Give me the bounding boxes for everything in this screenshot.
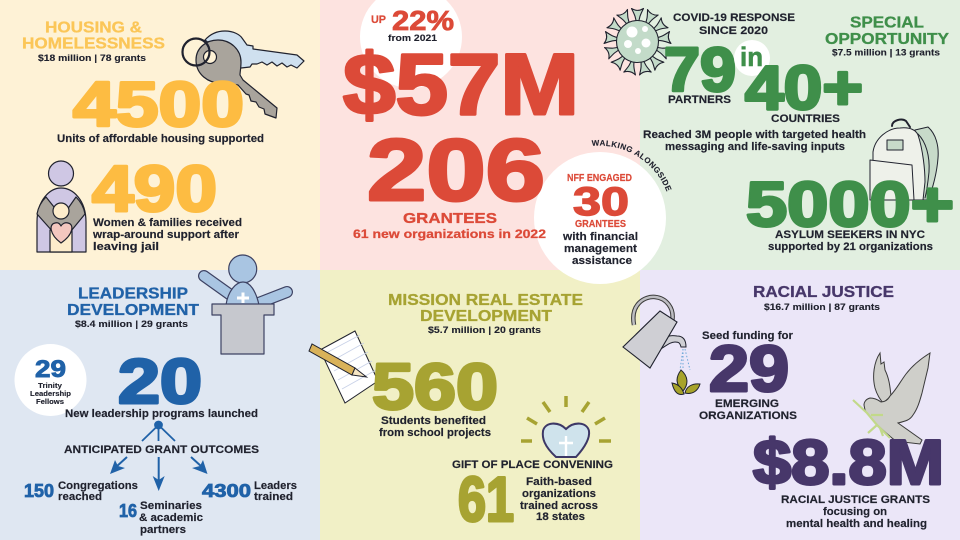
- stat: 40+ countries: COUNTRIES: [771, 113, 840, 125]
- callout: walking alongside circle: 30: [573, 180, 629, 224]
- panel: leadership development: [14, 255, 297, 536]
- heading: mission real estate: [388, 292, 583, 336]
- stat: 490 women and families: leaving jail: [93, 241, 159, 253]
- stat: 20 new programs: 20: [118, 347, 202, 417]
- stat: 4300 leaders: Leaders: [254, 480, 297, 492]
- stat: 5000+ asylum seekers: 5000+: [746, 170, 954, 240]
- stat: up 22 percent: from 2021: [388, 33, 438, 44]
- callout: walking alongside circle: assistance: [572, 255, 632, 267]
- stat: 560 students: 560: [372, 350, 498, 423]
- callout: walking alongside circle: GRANTEES: [575, 219, 626, 230]
- stat: 4300 leaders: trained: [254, 491, 293, 503]
- heading: covid-19 response: [673, 12, 795, 37]
- callout: 29 trinity leadership fellows: 29: [35, 356, 66, 383]
- heading: racial justice: [753, 284, 894, 313]
- stat: 5000+ asylum seekers: ASYLUM SEEKERS IN NYC: [775, 229, 925, 241]
- stat: 150 congregations: Congregations: [58, 480, 138, 492]
- stat: gift of place: 61: [458, 465, 514, 535]
- stat: 206 grantees: [353, 122, 546, 241]
- panel: racial justice: [623, 284, 944, 530]
- heading: leadership development: [67, 286, 200, 330]
- stat: 16 seminaries: [119, 500, 203, 536]
- stat: 560 students: Students benefited: [381, 415, 486, 427]
- stat: up 22 percent: [371, 5, 454, 44]
- heading: racial justice: RACIAL JUSTICE: [753, 284, 894, 301]
- icon: notepad and pencil: [309, 331, 378, 403]
- stat: 4500 units: [57, 70, 264, 145]
- icon: watering can and sprout: [623, 297, 700, 395]
- icon: figure at podium: [204, 255, 287, 354]
- stat: 20 new programs: [65, 347, 258, 420]
- stat: gift of place: GIFT OF PLACE CONVENING: [452, 459, 613, 471]
- heading: mission real estate: $5.7 million | 20 grants: [428, 325, 541, 336]
- stat: 490 women and families: Women & families received: [93, 217, 242, 229]
- callout: walking alongside circle: management: [564, 243, 637, 255]
- panel background: special opportunity: [640, 0, 960, 270]
- icon: backpack: [870, 120, 938, 200]
- heading: special opportunity: OPPORTUNITY: [825, 31, 950, 48]
- text: in: in: [740, 42, 763, 72]
- stat: 4300 leaders: 4300: [202, 481, 251, 501]
- callout: walking alongside circle: NFF ENGAGED: [567, 173, 632, 184]
- panel: total grants: [342, 0, 672, 284]
- stat: $8.8M racial justice grants: mental health and healing: [786, 518, 927, 530]
- text: anticipated outcomes: ANTICIPATED GRANT OUTCOMES: [64, 444, 259, 456]
- callout: walking alongside circle: [534, 140, 672, 284]
- heading: leadership development: DEVELOPMENT: [67, 302, 200, 319]
- stat: 29 emerging organizations: EMERGING: [715, 398, 779, 410]
- stat: 490 women and families: wrap-around support after: [92, 229, 240, 241]
- callout: 29 trinity leadership fellows: Leadership: [30, 391, 71, 398]
- text: reach: messaging and life-saving inputs: [665, 141, 845, 153]
- heading: mission real estate: DEVELOPMENT: [420, 308, 553, 325]
- callout: 29 trinity leadership fellows: Fellows: [36, 399, 64, 406]
- stat: 150 congregations: reached: [58, 491, 102, 503]
- stat: 16 seminaries: 16: [119, 501, 137, 521]
- stat: gift of place: trained across: [520, 500, 598, 512]
- heading: leadership development: LEADERSHIP: [78, 286, 188, 302]
- stat: 150 congregations: 150: [24, 481, 54, 501]
- icon: heart with rays: [521, 396, 611, 457]
- heading: special opportunity: [825, 14, 950, 58]
- stat: 16 seminaries: Seminaries: [140, 500, 202, 512]
- icon: branching node: [142, 422, 175, 441]
- stat: 29 emerging organizations: 29: [709, 332, 789, 405]
- stat: 4300 leaders: [202, 480, 297, 503]
- stat: 29 emerging organizations: Seed funding for: [702, 330, 794, 342]
- panel background: leadership: [0, 270, 320, 540]
- text: reach: [643, 129, 866, 153]
- stat: gift of place: Faith-based: [526, 476, 592, 488]
- heading: special opportunity: SPECIAL: [850, 14, 924, 32]
- callout: 29 trinity leadership fellows: Trinity: [38, 383, 62, 390]
- stat: 150 congregations: [24, 480, 138, 503]
- stat: 29 emerging organizations: ORGANIZATIONS: [699, 410, 797, 422]
- stat: 206 grantees: 61 new organizations in 2022: [353, 227, 546, 241]
- icon: virus: [604, 8, 671, 75]
- stat: $57M: $57M: [343, 37, 579, 133]
- panel: housing and homelessness: [22, 20, 304, 253]
- stat: $8.8M racial justice grants: [753, 428, 944, 530]
- stat: 20 new programs: New leadership programs launched: [65, 408, 258, 420]
- arrows: outcomes: [110, 457, 208, 491]
- panel: mission real estate development: [309, 292, 613, 535]
- stat: 4500 units: Units of affordable housing supported: [57, 133, 264, 145]
- panel background: housing: [0, 0, 320, 270]
- stat: 4500 units: 4500: [73, 70, 244, 140]
- heading: housing and homelessness: $18 million | 78 grants: [38, 53, 146, 64]
- callout: walking alongside circle: WALKING ALONGSIDE: [592, 140, 672, 192]
- heading: mission real estate: MISSION REAL ESTATE: [388, 292, 583, 309]
- stat: 490 women and families: 490: [92, 152, 217, 225]
- stat: $8.8M racial justice grants: focusing on: [823, 506, 887, 518]
- heading: housing and homelessness: HOMELESSNESS: [22, 36, 165, 52]
- icon: keys: [182, 31, 304, 118]
- text: reach: Reached 3M people with targeted health: [643, 129, 866, 141]
- heading: housing and homelessness: HOUSING &: [45, 20, 142, 36]
- stat: $8.8M racial justice grants: $8.8M: [753, 428, 944, 498]
- stat: 490 women and families: [92, 152, 242, 253]
- heading: housing and homelessness: [22, 20, 165, 64]
- icon: mother and child: [37, 161, 86, 252]
- panel background: total grants: [320, 0, 640, 270]
- stat: gift of place: 18 states: [536, 511, 585, 523]
- callout: up 22 percent circle: [360, 0, 462, 88]
- stat: 5000+ asylum seekers: supported by 21 organizations: [768, 241, 933, 253]
- stat: 40+ countries: 40+: [745, 54, 863, 123]
- callout: 29 trinity leadership fellows: [14, 344, 86, 416]
- stat: $8.8M racial justice grants: RACIAL JUSTICE GRANTS: [781, 494, 930, 506]
- stat: gift of place: organizations: [522, 488, 596, 500]
- callout: in circle: [734, 40, 770, 76]
- stat: up 22 percent: 22%: [392, 5, 454, 36]
- stat: 16 seminaries: & academic: [139, 512, 203, 524]
- stat: 206 grantees: 206: [367, 122, 545, 219]
- stat: 79 partners: 79: [664, 36, 736, 105]
- stat: 29 emerging organizations: [699, 330, 797, 422]
- heading: special opportunity: $7.5 million | 13 grants: [832, 48, 940, 58]
- stat: 79 partners: PARTNERS: [668, 94, 731, 106]
- stat: 16 seminaries: partners: [140, 524, 186, 536]
- panel: special opportunity: [604, 8, 954, 253]
- heading: racial justice: $16.7 million | 87 grants: [764, 302, 880, 313]
- icon: dove with olive branch: [853, 353, 930, 444]
- stat: 560 students: from school projects: [379, 427, 491, 439]
- heading: leadership development: $8.4 million | 29 grants: [75, 319, 188, 330]
- heading: covid-19 response: SINCE 2020: [699, 25, 768, 37]
- stat: gift of place: [452, 459, 613, 535]
- panel background: mission real estate: [320, 270, 640, 540]
- stat: up 22 percent: UP: [371, 14, 386, 26]
- stat: 206 grantees: GRANTEES: [403, 211, 497, 227]
- panel background: racial justice: [640, 270, 960, 540]
- callout: walking alongside circle: with financial: [562, 231, 638, 243]
- heading: covid-19 response: COVID-19 RESPONSE: [673, 12, 795, 24]
